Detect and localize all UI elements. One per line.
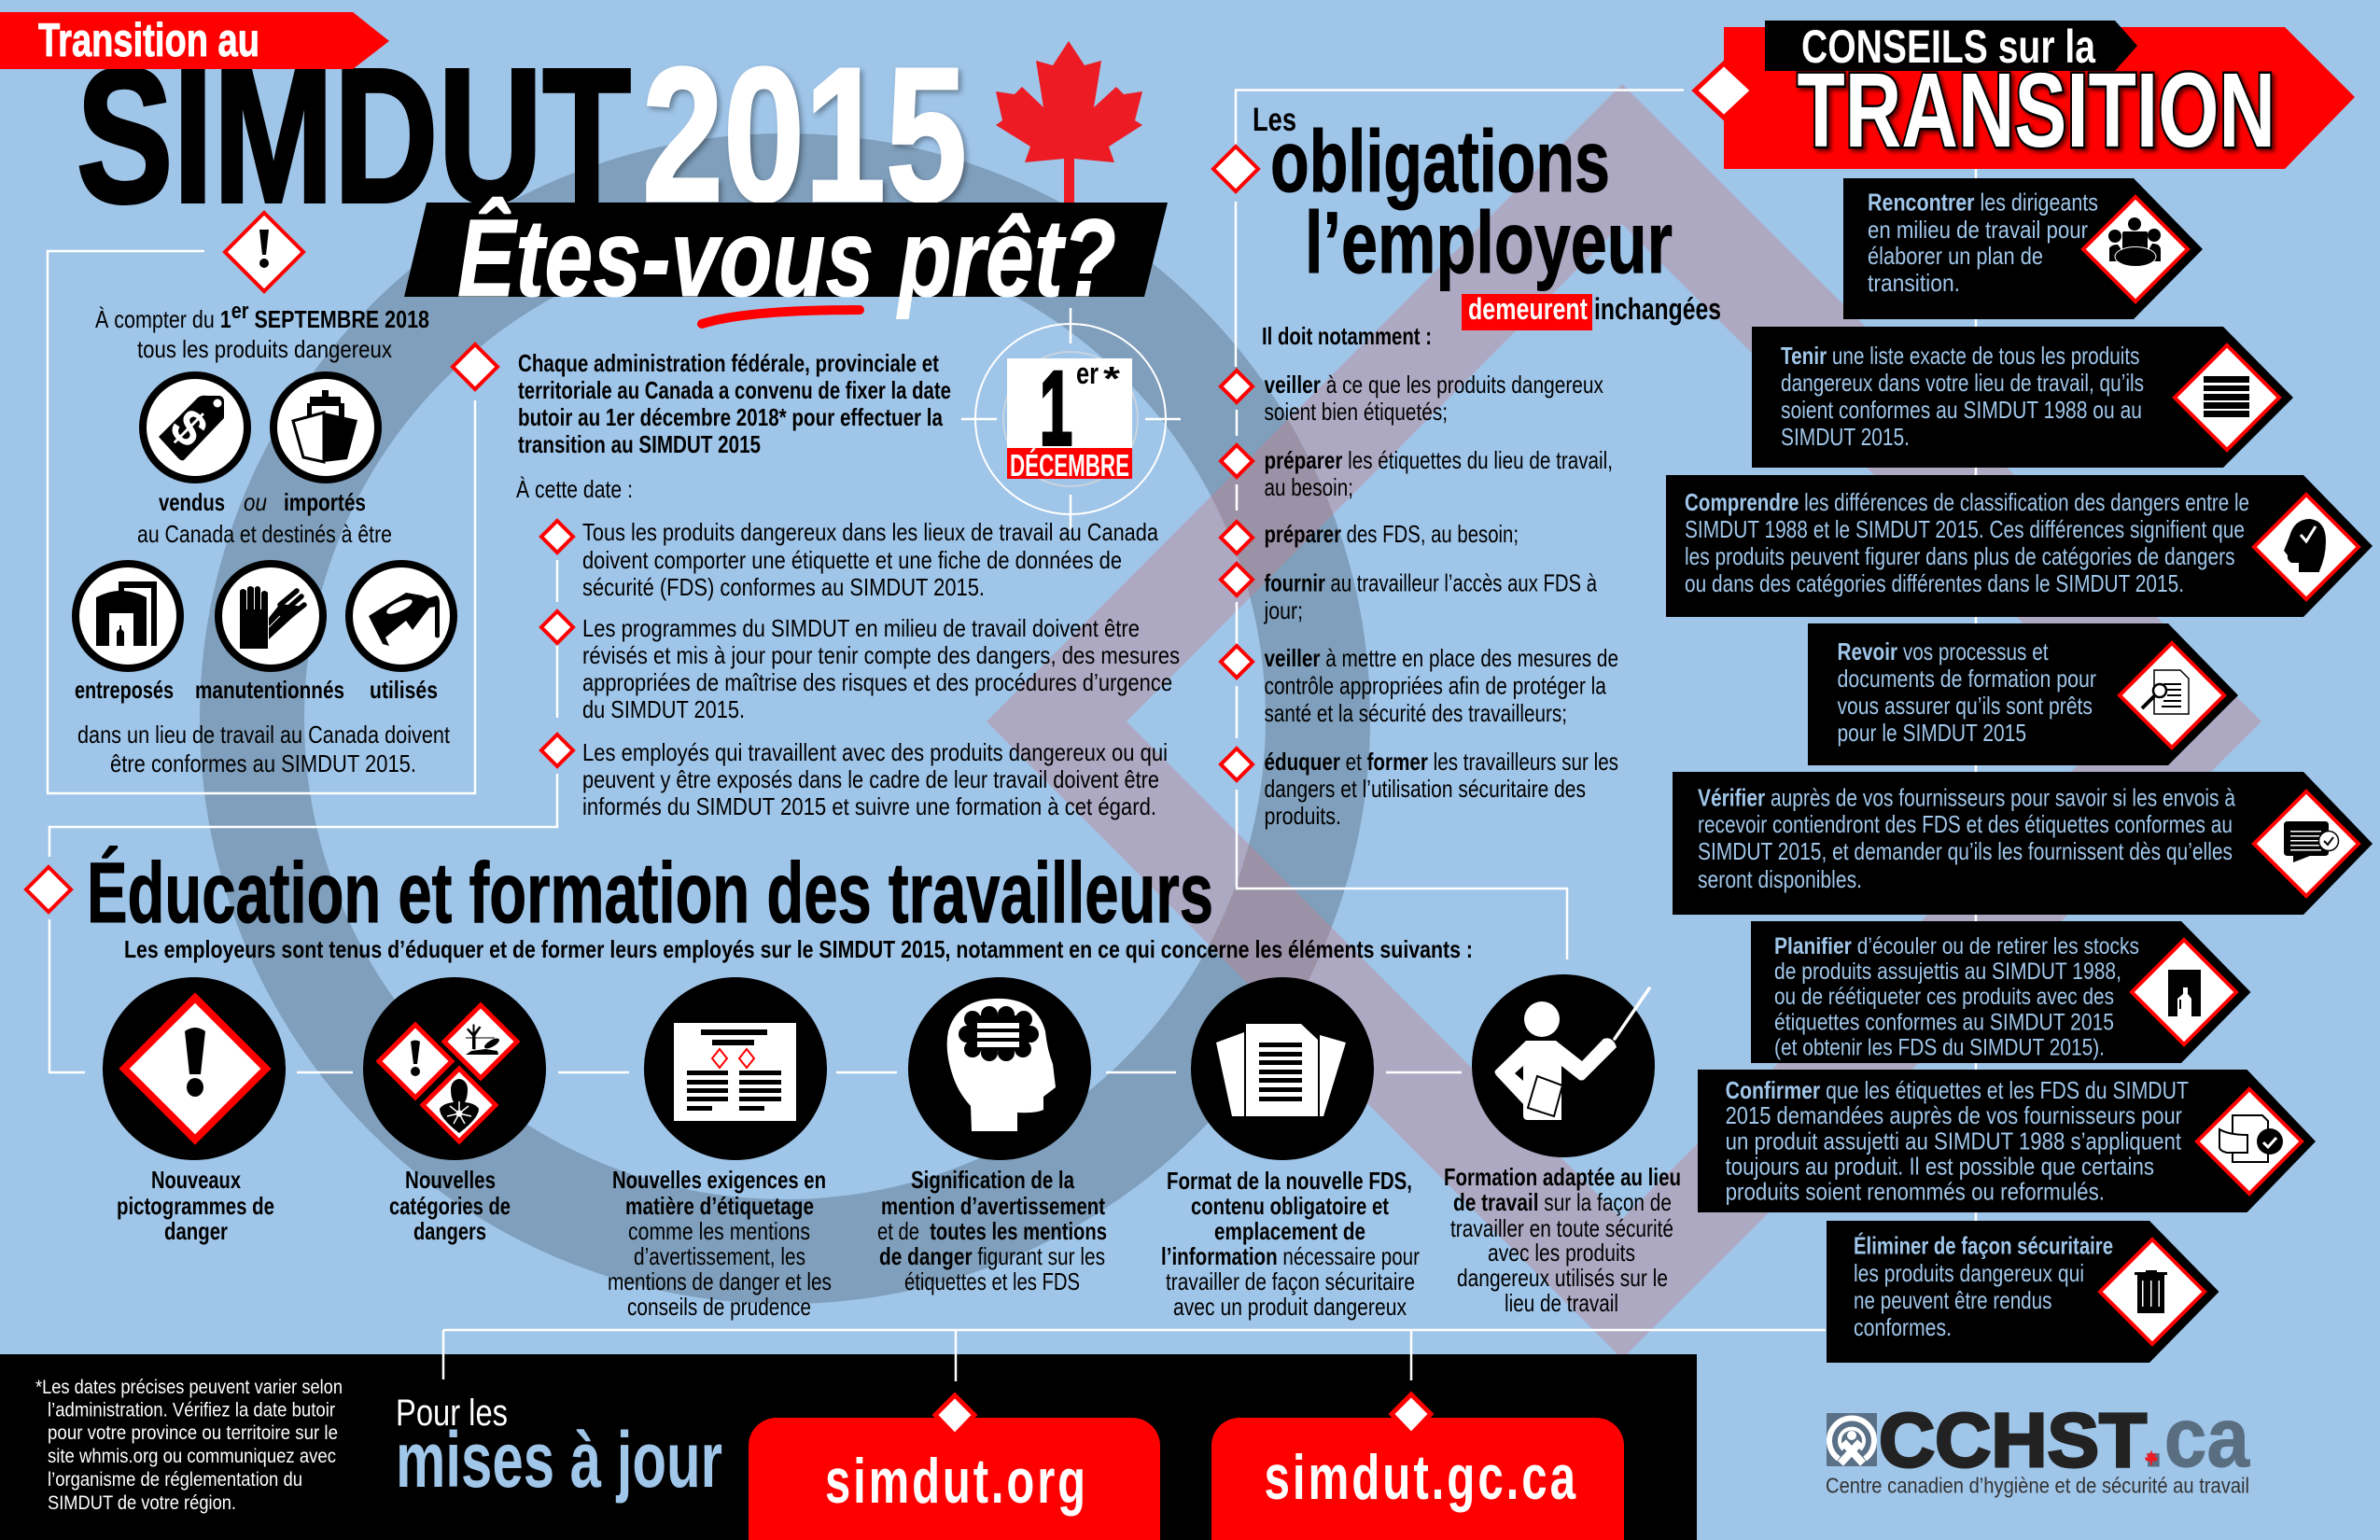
panel: bottom black bar [0, 1330, 1697, 1540]
text: vérifier [1698, 783, 2235, 893]
card: revoir [1808, 623, 2238, 765]
text: rencontrer: en milieu de travail pour [1868, 216, 2088, 244]
text: comprendre: les produits peuvent figurer dans plus de catégories de dangers [1685, 542, 2235, 570]
bullet: veiller mesures: santé et la sécurité des travailleurs; [1264, 699, 1567, 727]
card: éliminer [1827, 1221, 2219, 1363]
text: storage verbs [75, 676, 438, 704]
bullet: fournir: jour; [1264, 596, 1303, 624]
text: caption 2: Nouvelles [405, 1166, 496, 1194]
bullet: veiller étiquetage: veiller à ce que les produits dangereux [1264, 371, 1603, 399]
text: caption 6: dangereux utilisés sur le [1457, 1264, 1668, 1292]
bullet: éduquer et former: dangers et l’utilisation sécuritaire des [1264, 775, 1586, 803]
text: storage verbs: entreposés [75, 676, 174, 704]
icon: list bars [2204, 376, 2249, 417]
text: vendus ou importés: au Canada et destinés à être [137, 520, 392, 548]
banner: Transition au: Transition au [38, 14, 259, 66]
icon: red diamond [1213, 147, 1258, 191]
card: comprendre [1666, 475, 2373, 617]
bullet: programmes: du SIMDUT 2015. [582, 695, 745, 723]
text: rencontrer [1868, 189, 2098, 297]
text: comprendre [1685, 488, 2249, 597]
text: revoir: pour le SIMDUT 2015 [1837, 719, 2026, 747]
text: caption 3: d’avertissement, les [634, 1242, 805, 1270]
card: rencontrer [1843, 178, 2203, 319]
text: il doit notamment: Il doit notamment : [1262, 322, 1432, 350]
text: éliminer: Éliminer de façon sécuritaire [1854, 1232, 2113, 1260]
bullet: fournir [1221, 564, 1597, 624]
bullet: préparer étiquettes: préparer les étiquettes du lieu de travail, [1264, 446, 1613, 474]
text: revoir: documents de formation pour [1837, 665, 2096, 693]
heading: pour les mises à jour: Pour les [396, 1393, 508, 1434]
text: revoir [1837, 637, 2096, 747]
title: Transition au SIMDUT 2015 [0, 12, 1142, 243]
bullet: employés [541, 735, 1168, 820]
bullet: veiller mesures [1221, 644, 1618, 727]
text: tenir: SIMDUT 2015. [1781, 423, 1910, 451]
text: caption 6: de travail sur la façon de [1453, 1188, 1672, 1216]
icon: head check [2284, 519, 2326, 572]
bullet: fournir: fournir au travailleur l’accès aux FDS à [1264, 569, 1597, 597]
bullet: veiller mesures: contrôle appropriées afin de protéger la [1264, 672, 1606, 700]
icon: storage tank [76, 564, 180, 668]
title number 2015: 2015 [642, 28, 967, 242]
card: confirmer [1698, 1070, 2316, 1212]
heading: obligations: l’employeur [1305, 193, 1673, 291]
panel: obligations de l'employeur [1213, 102, 1721, 830]
card: tenir une liste [1752, 327, 2293, 468]
text: planifier: Planifier d’écouler ou de retirer les stocks [1774, 933, 2139, 959]
text: comprendre: SIMDUT 1988 et le SIMDUT 2015. Ces différences signifient que [1685, 515, 2245, 543]
text: storage verbs: utilisés [370, 676, 438, 704]
icon: red diamond [26, 867, 71, 912]
bullet: produits: doivent comporter une étiquette et une fiche de données de [582, 546, 1122, 574]
icon: oil can [349, 564, 454, 668]
text: vérifier: SIMDUT 2015, et demander qu’ils les fournissent dès qu’elles [1698, 837, 2233, 865]
text: footnote: l’administration. Vérifiez la date butoir [48, 1400, 335, 1421]
text: intro bold: territoriale au Canada a convenu de fixer la date [518, 376, 951, 404]
text: caption 1: danger [164, 1217, 228, 1245]
text: footnote [35, 1377, 343, 1514]
text: caption 2 [389, 1166, 511, 1245]
icon: logo square [1827, 1413, 1877, 1466]
text: caption 3: mentions de danger et les [608, 1267, 832, 1295]
icon: drum and bottle [2168, 970, 2201, 1016]
text: à cette date: À cette date : [516, 475, 633, 503]
icon: document magnifier [2142, 670, 2189, 714]
text: date intro [95, 299, 429, 363]
text: caption 5: contenu obligatoire et [1191, 1192, 1389, 1220]
bullet: veiller mesures: veiller à mettre en place des mesures de [1264, 644, 1618, 672]
icon: trash bin [2135, 1270, 2167, 1313]
bullet: veiller étiquetage: soient bien étiquetés; [1264, 398, 1448, 426]
panel: date butoir [453, 344, 1180, 820]
text: caption 4: et de toutes les mentions [877, 1217, 1107, 1245]
panel: éducation et formation [26, 845, 1681, 1321]
icon: three hazard diamonds [363, 977, 546, 1160]
text: date intro: tous les produits dangereux [137, 335, 392, 363]
bullet: produits [541, 518, 1158, 601]
text: caption 4: Signification de la [911, 1166, 1074, 1194]
bullet: programmes: appropriées de maîtrise des risques et des procédures d’urgence [582, 668, 1172, 696]
text: caption 5: Format de la nouvelle FDS, [1167, 1167, 1412, 1195]
text: caption 5: travailler de façon sécuritaire [1166, 1267, 1415, 1295]
text: éliminer: les produits dangereux qui [1854, 1259, 2084, 1287]
text: planifier: de produits assujettis au SIMDUT 1988, [1774, 959, 2121, 985]
bullet: préparer étiquettes [1221, 445, 1613, 501]
text: confirmer: Confirmer que les étiquettes et les FDS du SIMDUT [1726, 1076, 2189, 1104]
heading: obligations: Les [1253, 102, 1296, 138]
text: tenir: soient conformes au SIMDUT 1988 ou au [1781, 396, 2142, 424]
text: éliminer: ne peuvent être rendus [1854, 1286, 2051, 1314]
text: footnote: l’organisme de réglementation du [48, 1469, 302, 1491]
text: date intro: SEPTEMBRE 2018 [249, 305, 429, 333]
text: caption 3: comme les mentions [628, 1217, 810, 1245]
text: caption 3 [608, 1166, 832, 1321]
icon: target calendar 1er décembre [961, 308, 1181, 529]
text: footnote: pour votre province ou territoire sur le [48, 1422, 338, 1444]
text: subheading: Les employeurs sont tenus d’éduquer et de former leurs employés sur le SIMDUT 2015, notamment en ce qui concerne les éléments suivants : [124, 935, 1473, 963]
text: vendus ou importés: importés [284, 488, 366, 516]
text: caption 6: Formation adaptée au lieu [1444, 1163, 1681, 1191]
icon: target calendar 1er décembre: DÉCEMBRE [1010, 448, 1129, 483]
bullet: préparer étiquettes: au besoin; [1264, 473, 1353, 501]
text: caption 4: mention d’avertissement [881, 1192, 1105, 1220]
bullet: préparer FDS: préparer des FDS, au besoin; [1264, 520, 1519, 548]
text: vérifier: seront disponibles. [1698, 865, 1862, 893]
callout: demeurent inchangées [1462, 292, 1721, 330]
text: vendus ou importés: vendus [159, 488, 225, 516]
text: revoir: vous assurer qu’ils sont prêts [1837, 692, 2093, 720]
text: vendus ou importés: ou [244, 488, 267, 516]
heading: pour les mises à jour [396, 1393, 722, 1504]
icon: trainer with pointer [1472, 974, 1655, 1157]
icon: pictogram circle [103, 977, 286, 1160]
bullet: veiller étiquetage [1221, 371, 1603, 426]
logo: CCHST.ca: .ca [2143, 1392, 2250, 1485]
text: éliminer [1854, 1232, 2113, 1341]
text: caption 3: matière d’étiquetage [625, 1192, 814, 1220]
text: confirmer [1726, 1076, 2189, 1206]
heading: Êtes-vous prêt?: Êtes-vous prêt? [457, 196, 1116, 320]
bullet: éduquer et former [1221, 748, 1618, 830]
card: vérifier [1673, 772, 2373, 915]
banner: conseils sur la transition [1695, 21, 2355, 169]
card: planifier [1751, 921, 2251, 1063]
text: revoir: Revoir vos processus et [1837, 637, 2049, 665]
banner: Transition au [0, 12, 389, 69]
icon: speech bubble check [2284, 821, 2339, 862]
heading: pour les mises à jour: mises à jour [396, 1416, 722, 1504]
text: caption 1: pictogrammes de [117, 1192, 274, 1220]
text: vendus ou importés [137, 488, 392, 548]
banner: conseils sur la transition: CONSEILS sur la [1801, 21, 2096, 73]
text: planifier [1774, 933, 2139, 1061]
text: rencontrer: transition. [1868, 269, 1960, 297]
icon: hazard diamond exclamation [225, 213, 303, 291]
bullet: produits: Tous les produits dangereux dans les lieux de travail au Canada [582, 518, 1158, 546]
icon: safety data sheets [1191, 977, 1374, 1160]
text: caption 5: emplacement de [1214, 1217, 1365, 1245]
bullet: programmes: révisés et mis à jour pour tenir compte des dangers, des mesures [582, 641, 1180, 669]
text: caption 6 [1444, 1163, 1681, 1317]
text: caption 5: l’information nécessaire pour [1161, 1242, 1420, 1270]
callout: demeurent inchangées: inchangées [1594, 292, 1721, 326]
heading: obligations: obligations [1270, 112, 1610, 210]
icon: ship [273, 375, 378, 480]
text: date intro: À compter du 1 [95, 305, 240, 333]
text: intro bold: Chaque administration fédérale, provinciale et [518, 349, 939, 377]
text: caption 4: de danger figurant sur les [879, 1242, 1105, 1270]
icon: red diamond [1695, 63, 1753, 118]
text: caption 3: conseils de prudence [627, 1293, 811, 1321]
text: rencontrer: élaborer un plan de [1868, 242, 2043, 270]
text: planifier: (et obtenir les FDS du SIMDUT 2015). [1774, 1035, 2105, 1061]
bullet: employés: informés du SIMDUT 2015 et suivre une formation à cet égard. [582, 792, 1156, 820]
logo: CCHST.ca [1826, 1392, 2250, 1497]
text: caption 6: lieu de travail [1505, 1289, 1618, 1317]
icon: documents check [2219, 1115, 2283, 1162]
text: tenir: Tenir une liste exacte de tous les produits [1781, 342, 2139, 370]
text: intro bold: butoir au 1er décembre 2018* pour effectuer la [518, 403, 943, 431]
button: simdut.org: simdut.org [825, 1446, 1088, 1517]
text: caption 4 [877, 1166, 1107, 1295]
text: caption 3: Nouvelles exigences en [612, 1166, 826, 1194]
text: footnote: SIMDUT de votre région. [48, 1492, 236, 1514]
title: Transition au SIMDUT 2015: SIMDUT [77, 29, 631, 243]
text: comprendre: ou dans des catégories différentes dans le SIMDUT 2015. [1685, 569, 2184, 597]
text: éliminer: conformes. [1854, 1313, 1952, 1341]
icon: red diamond [453, 344, 497, 389]
panel: produits dangereux au Canada [75, 213, 454, 777]
bullet: préparer FDS [1221, 520, 1519, 553]
text: tenir: dangereux dans votre lieu de travail, qu’ils [1781, 369, 2144, 397]
text: vérifier: Vérifier auprès de vos fournisseurs pour savoir si les envois à [1698, 783, 2235, 811]
bullet: produits: sécurité (FDS) conformes au SIMDUT 2015. [582, 573, 985, 601]
text: planifier: étiquettes conformes au SIMDUT 2015 [1774, 1010, 2114, 1036]
icon: gloves [218, 564, 323, 668]
text: caption 1: Nouveaux [151, 1166, 241, 1194]
icon: meeting [2108, 217, 2161, 267]
icon: price tag [143, 375, 247, 480]
heading: obligations [1253, 102, 1673, 291]
logo: CCHST.ca: CCHST [1879, 1398, 2147, 1483]
text: caption 5: avec un produit dangereux [1173, 1293, 1407, 1321]
icon: price tag: $ [159, 399, 218, 458]
text: caption 4: étiquettes et les FDS [904, 1267, 1080, 1295]
bullet: employés: peuvent y être exposés dans le cadre de leur travail doivent être [582, 765, 1159, 793]
icon: head with brain [908, 977, 1091, 1160]
bullet: employés: Les employés qui travaillent avec des produits dangereux ou qui [582, 738, 1168, 766]
text: conformity statement [77, 721, 451, 777]
text: tenir [1781, 342, 2144, 451]
icon: target calendar 1er décembre: er [1076, 357, 1099, 390]
text: footnote: site whmis.org ou communiquez avec [48, 1446, 336, 1467]
text: caption 1 [117, 1166, 274, 1245]
text: caption 6: avec les produits [1488, 1239, 1635, 1267]
text: caption 2: dangers [413, 1217, 486, 1245]
heading: éducation: Éducation et formation des travailleurs [87, 845, 1213, 941]
bullet: programmes: Les programmes du SIMDUT en milieu de travail doivent être [582, 614, 1140, 642]
bullet: éduquer et former: éduquer et former les travailleurs sur les [1264, 748, 1618, 776]
text: storage verbs: manutentionnés [195, 676, 344, 704]
text: date intro: er [231, 299, 249, 324]
text: caption 2: catégories de [389, 1192, 511, 1220]
text: confirmer: produits soient renommés ou reformulés. [1726, 1178, 2105, 1206]
icon: maple leaf [996, 41, 1142, 203]
button: simdut.gc.ca: simdut.gc.ca [1264, 1442, 1578, 1513]
text: intro bold: transition au SIMDUT 2015 [518, 430, 761, 458]
button: simdut.org [749, 1395, 1160, 1540]
icon: target calendar 1er décembre: * [1103, 359, 1120, 398]
text: caption 6: travailler en toute sécurité [1450, 1214, 1673, 1242]
text: intro bold [518, 349, 951, 458]
bullet: éduquer et former: produits. [1264, 802, 1341, 830]
text: rencontrer: Rencontrer les dirigeants [1868, 189, 2098, 217]
text: footnote: *Les dates précises peuvent varier selon [35, 1377, 343, 1398]
text: confirmer: 2015 demandées auprès de vos fournisseurs pour [1726, 1101, 2182, 1129]
text: planifier: ou de réétiqueter ces produits avec des [1774, 984, 2114, 1010]
button: simdut.gc.ca [1211, 1394, 1624, 1540]
text: caption 5 [1161, 1167, 1420, 1321]
text: conformity statement: être conformes au SIMDUT 2015. [110, 749, 416, 777]
text: confirmer: toujours au produit. Il est possible que certains [1726, 1152, 2154, 1180]
icon: target calendar 1er décembre: 1 [1040, 350, 1072, 467]
icon: label page [644, 977, 827, 1160]
text: vérifier: recevoir contiendront des FDS et des étiquettes conformes au [1698, 810, 2233, 838]
logo: CCHST.ca: Centre canadien d’hygiène et de sécurité au travail [1826, 1473, 2249, 1497]
text: comprendre: Comprendre les différences de classification des dangers entre le [1685, 488, 2249, 516]
text: conformity statement: dans un lieu de travail au Canada doivent [77, 721, 451, 749]
callout: demeurent inchangées: demeurent [1468, 292, 1588, 326]
connector lines [48, 90, 1976, 1330]
text: confirmer: un produit assujetti au SIMDUT 1988 s’appliquent [1726, 1127, 2182, 1155]
bullet: programmes [541, 611, 1180, 723]
